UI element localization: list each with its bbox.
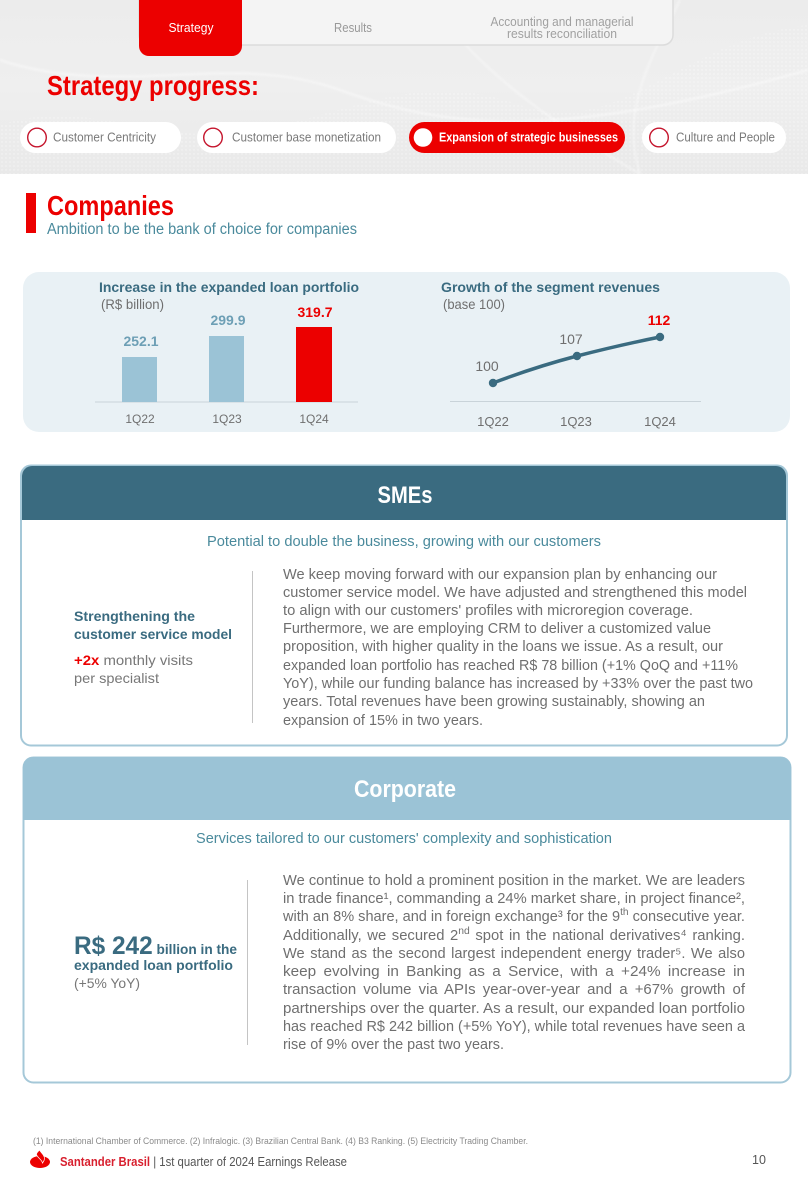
- section heading: Companies: Ambition to be the bank of choice for companies: [47, 221, 357, 238]
- Corporate body text: rise of 9% over the past two years.: [283, 1036, 504, 1053]
- Corporate body text: with an 8% share, and in foreign exchange³ for the 9th consecutive year.: [282, 906, 745, 925]
- bar chart: expanded loan portfolio: 1Q23: [212, 412, 242, 426]
- SMEs body text: expansion of 15% in two years.: [283, 712, 483, 729]
- SMEs body text: years. Total revenues have been growing sustainably, showing an: [283, 693, 705, 710]
- bar chart: expanded loan portfolio: (R$ billion): [101, 296, 164, 312]
- SMEs key figure: +2x monthly visits: [74, 652, 193, 668]
- header background: [0, 0, 808, 174]
- tab: Accounting: [490, 15, 634, 41]
- Corporate body text: keep evolving in Banking as a Service, with a +24% increase in: [283, 963, 745, 980]
- line chart: segment revenues: 100: [475, 358, 499, 374]
- line chart: segment revenues: 112: [648, 312, 671, 328]
- Corporate body text: in trade finance¹, commanding a 24% market share, in project finance²,: [283, 890, 745, 907]
- SMEs body text: customer service model. We have adjusted and strengthened this model: [283, 584, 747, 601]
- pillar pills: [20, 122, 786, 153]
- SMEs key figure: [74, 608, 232, 686]
- active tab: Strategy: Strategy: [168, 21, 214, 35]
- pill: Expansion of strategic businesses: [409, 122, 625, 153]
- SMEs body text: expanded loan portfolio has reached R$ 78 billion (+1% QoQ and +11%: [283, 657, 738, 674]
- line chart: segment revenues: (base 100): [443, 296, 505, 312]
- SMEs header: [22, 466, 786, 520]
- SMEs key figure: customer service model: [74, 626, 232, 642]
- SMEs body text: We keep moving forward with our expansion plan by enhancing our: [283, 566, 717, 583]
- bar chart: expanded loan portfolio: 299.9: [210, 312, 246, 328]
- section heading: Companies: [26, 190, 357, 238]
- Corporate header: [23, 757, 791, 820]
- title: Strategy progress: Strategy progress:: [47, 70, 259, 101]
- Corporate key figure: expanded loan portfolio: [74, 957, 233, 973]
- SMEs body text: [283, 566, 753, 729]
- bar chart: expanded loan portfolio: 252.1: [124, 333, 159, 349]
- bar chart: expanded loan portfolio: 319.7: [298, 304, 333, 320]
- Corporate key figure: [74, 932, 237, 991]
- Corporate body text: We continue to hold a prominent position in the market. We are leaders: [283, 872, 745, 889]
- SMEs body text: Furthermore, we are employing CRM to deliver a customized value: [283, 620, 711, 637]
- pill: Customer Centricity: [20, 122, 181, 153]
- line chart: segment revenues: [441, 279, 701, 429]
- navigation tabs: [139, 0, 673, 56]
- SMEs body text: proposition, with higher quality in the loans we issue. As a result, our: [283, 638, 723, 655]
- line chart: segment revenues: Growth of the segment revenues: [441, 279, 660, 295]
- SMEs body text: YoY), while our funding balance has increased by +33% over the past two: [283, 675, 753, 692]
- footnote: (1) International Chamber of Commerce. (2) Infralogic. (3) Brazilian Central Bank. (4) B3 Ranking. (5) Electricity Trading Chamber.: [33, 1136, 528, 1147]
- pill: Customer base monetization: Customer base monetization: [232, 130, 381, 144]
- SMEs subtitle: Potential to double the business, growing with our customers: [207, 533, 601, 550]
- page number: 10: [752, 1153, 766, 1167]
- bar chart: expanded loan portfolio: 1Q24: [299, 412, 329, 426]
- Corporate body text: has reached R$ 242 billion (+5% YoY), while total revenues have seen a: [283, 1018, 746, 1035]
- Corporate body text: transaction volume via APIs year-over-year and a +67% growth of: [283, 981, 746, 998]
- panel: SMEs: [21, 466, 787, 746]
- Corporate key figure: R$ 242 billion in the: [74, 932, 237, 960]
- panel: Corporate: [23, 757, 791, 1082]
- Corporate subtitle: Services tailored to our customers' complexity and sophistication: [196, 830, 612, 847]
- footer text: Santander Brasil | 1st quarter of 2024 Earnings Release: [60, 1155, 347, 1169]
- Corporate key figure: (+5% YoY): [74, 975, 140, 991]
- tab: Results: Results: [334, 21, 372, 35]
- SMEs header: SMEs: [378, 482, 432, 509]
- Corporate header: Corporate: [354, 776, 456, 803]
- pill: Customer base monetization: [197, 122, 396, 153]
- Corporate body text: partnerships over the quarter. As a result, our expanded loan portfolio: [283, 1000, 745, 1017]
- line chart: segment revenues: 1Q23: [560, 414, 592, 429]
- pill: Culture and People: Culture and People: [676, 130, 775, 144]
- tab: Accounting: Accounting and managerial: [490, 15, 634, 29]
- tab: Accounting: results reconciliation: [507, 27, 617, 41]
- SMEs key figure: Strengthening the: [74, 608, 195, 624]
- section heading: Companies: Companies: [47, 190, 174, 221]
- Corporate body text: We stand as the second largest independent energy trader⁵. We also: [283, 945, 745, 962]
- bar chart: expanded loan portfolio: [95, 279, 359, 426]
- active tab: Strategy: [139, 0, 242, 56]
- line chart: segment revenues: 107: [559, 331, 583, 347]
- SMEs key figure: per specialist: [74, 670, 159, 686]
- SMEs body text: to align with our customers' profiles with microregion coverage.: [283, 602, 693, 619]
- Corporate body text: [282, 872, 746, 1053]
- icon: Santander flame logo: [30, 1150, 50, 1168]
- pill: Expansion of strategic businesses: Expansion of strategic businesses: [439, 130, 618, 144]
- line chart: segment revenues: 1Q22: [477, 414, 509, 429]
- Corporate body text: Additionally, we secured 2nd spot in the national derivatives⁴ ranking.: [283, 925, 745, 944]
- bar chart: expanded loan portfolio: Increase in the expanded loan portfolio: [99, 279, 359, 295]
- charts panel: [23, 272, 790, 432]
- bar chart: expanded loan portfolio: 1Q22: [125, 412, 155, 426]
- pill: Culture and People: [642, 122, 786, 153]
- pill: Customer Centricity: Customer Centricity: [53, 130, 157, 144]
- line chart: segment revenues: 1Q24: [644, 414, 676, 429]
